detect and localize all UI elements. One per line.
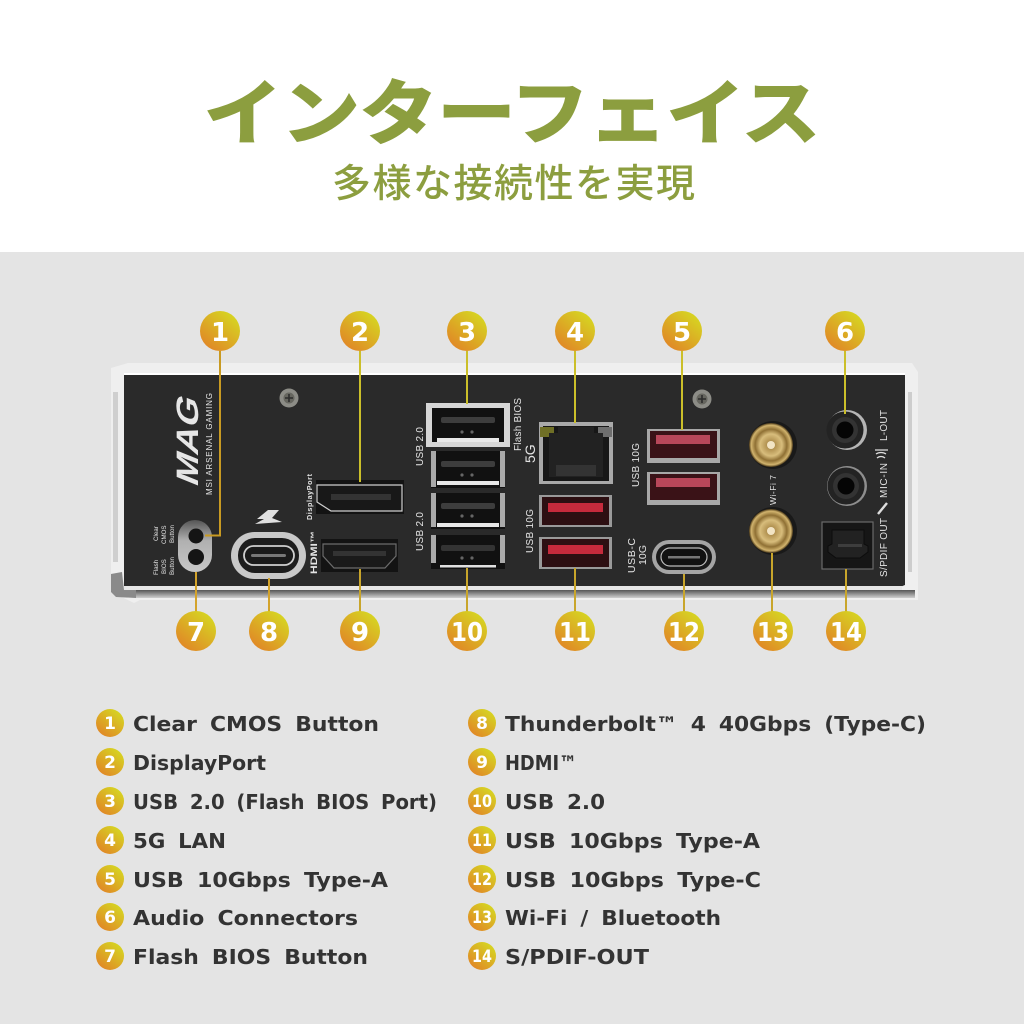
legend item 14: 14 bbox=[472, 947, 492, 967]
port: USB 2.0 stack: USB 2.0 bbox=[415, 427, 426, 466]
legend item 7: 7 bbox=[104, 947, 116, 967]
legend item 12 bbox=[468, 865, 761, 893]
legend item 14 bbox=[468, 942, 649, 970]
background: white header bbox=[0, 0, 1024, 252]
badge 11 bbox=[555, 611, 595, 651]
badge 9 bbox=[340, 611, 380, 651]
legend item 3: USB 2.0 (Flash BIOS Port) bbox=[133, 790, 437, 814]
legend item 9 bbox=[468, 748, 577, 776]
legend item 1 bbox=[96, 709, 379, 737]
badge 12: 12 bbox=[668, 618, 700, 648]
legend item 12: USB 10Gbps Type-C bbox=[505, 868, 761, 892]
shield right fold bbox=[908, 392, 912, 572]
badge 14: 14 bbox=[830, 618, 862, 648]
legend item 10: USB 2.0 bbox=[505, 790, 605, 814]
icon: MAG logo: MAG bbox=[170, 389, 205, 491]
plate top highlight bbox=[124, 373, 905, 375]
port: audio jacks: S/PDIF OUT bbox=[879, 518, 890, 577]
legend item 9: 9 bbox=[476, 753, 488, 773]
badge 12 bbox=[664, 611, 704, 651]
legend item 6: 6 bbox=[104, 908, 116, 928]
port: USB 2 bbox=[431, 451, 505, 488]
badge 9: 9 bbox=[351, 618, 369, 648]
legend item 5: USB 10Gbps Type-A bbox=[133, 868, 389, 892]
legend item 12: 12 bbox=[472, 870, 492, 890]
legend item 13 bbox=[468, 903, 721, 931]
port: USB-C 10G: USB-C bbox=[626, 538, 638, 573]
port: red USB 10G left pair: USB 10G bbox=[525, 509, 536, 553]
connector lines bbox=[196, 351, 846, 612]
port: S/PDIF optical bbox=[822, 522, 873, 569]
badge 6 bbox=[825, 311, 865, 351]
port: clear CMOS and flash BIOS buttons bbox=[153, 520, 212, 575]
badge 7: 7 bbox=[187, 618, 205, 648]
port: 5G LAN bbox=[522, 422, 613, 484]
badge 10 bbox=[447, 611, 487, 651]
port: clear CMOS and flash BIOS buttons: BIOS bbox=[161, 559, 168, 574]
port: USB 2.0 stack: Flash BIOS bbox=[513, 398, 524, 451]
icon: MAG logo bbox=[170, 389, 214, 495]
legend item 2: 2 bbox=[104, 753, 116, 773]
badge 3: 3 bbox=[458, 318, 476, 348]
badge 7 bbox=[176, 611, 216, 651]
port: HDMI bbox=[309, 531, 398, 574]
callout badges: bottom row bbox=[176, 611, 866, 651]
legend item 6: Audio Connectors bbox=[133, 906, 358, 930]
legend item 9: HDMI™ bbox=[505, 751, 577, 775]
port: USB-C 10G: 10G bbox=[637, 545, 649, 565]
port: 5G LAN: 5G bbox=[522, 444, 538, 463]
port: DisplayPort: DisplayPort bbox=[305, 473, 314, 520]
badge 8: 8 bbox=[260, 618, 278, 648]
badge 11: 11 bbox=[559, 618, 591, 648]
plate bottom highlight bbox=[124, 586, 902, 590]
legend item 3: 3 bbox=[104, 792, 116, 812]
callout badges: top row bbox=[200, 311, 865, 351]
legend item 4 bbox=[96, 826, 226, 854]
badge 13: 13 bbox=[757, 618, 789, 648]
port: Wi-Fi antenna lower bbox=[749, 507, 797, 555]
legend item 1: 1 bbox=[104, 714, 116, 734]
port: clear CMOS and flash BIOS buttons: Flash bbox=[153, 559, 160, 575]
icon: screw left bbox=[280, 388, 298, 408]
legend: left column bbox=[96, 709, 437, 970]
port: clear CMOS and flash BIOS buttons: Clear bbox=[153, 526, 160, 541]
legend item 7 bbox=[96, 942, 368, 970]
port: red USB 10G right pair: USB 10G bbox=[631, 443, 642, 487]
icon: screw right bbox=[692, 390, 712, 408]
legend item 5 bbox=[96, 865, 389, 893]
legend item 8: Thunderbolt™ 4 40Gbps (Type-C) bbox=[505, 712, 926, 736]
legend item 4: 5G LAN bbox=[133, 829, 226, 853]
port: USB 2.0 stack bbox=[415, 398, 524, 569]
port: Thunderbolt Type-C bbox=[231, 532, 306, 579]
legend item 13: Wi-Fi / Bluetooth bbox=[505, 906, 721, 930]
badge 4: 4 bbox=[566, 318, 584, 348]
badge 1: 1 bbox=[211, 318, 229, 348]
port: HDMI: HDMI™ bbox=[309, 531, 319, 574]
legend item 10: 10 bbox=[472, 792, 492, 812]
shield lower lip bbox=[136, 590, 915, 598]
legend item 4: 4 bbox=[104, 831, 116, 851]
label: Wi-Fi 7: Wi-Fi 7 bbox=[768, 475, 778, 505]
badge 14 bbox=[826, 611, 866, 651]
badge 5: 5 bbox=[673, 318, 691, 348]
port: clear CMOS and flash BIOS buttons: CMOS bbox=[161, 525, 168, 544]
port: USB 3 bbox=[431, 493, 505, 529]
port: USB 2.0 stack: USB 2.0 bbox=[415, 512, 426, 551]
subtitle: 多様な接続性を実現 bbox=[332, 153, 695, 209]
badge 3 bbox=[447, 311, 487, 351]
port: audio jacks: MIC-IN bbox=[879, 463, 890, 498]
legend item 8: 8 bbox=[476, 714, 488, 734]
legend item 5: 5 bbox=[104, 870, 116, 890]
port: red USB 10G left pair bbox=[525, 495, 612, 569]
legend item 6 bbox=[96, 903, 358, 931]
icon: thunderbolt bolt bbox=[255, 510, 282, 524]
port: USB-C 10G bbox=[626, 538, 716, 574]
panel: I/O shield bbox=[111, 351, 918, 612]
legend item 13: 13 bbox=[472, 908, 492, 928]
legend item 11 bbox=[468, 826, 761, 854]
shield left fold bbox=[113, 392, 118, 562]
badge 2 bbox=[340, 311, 380, 351]
legend item 2: DisplayPort bbox=[133, 751, 266, 775]
badge 5 bbox=[662, 311, 702, 351]
legend item 1: Clear CMOS Button bbox=[133, 712, 379, 736]
badge 4 bbox=[555, 311, 595, 351]
port: Wi-Fi antenna upper bbox=[749, 421, 797, 469]
shield metal frame bbox=[111, 363, 918, 603]
port: clear CMOS and flash BIOS buttons: Button bbox=[169, 557, 176, 575]
port: USB flash BIOS bbox=[426, 403, 510, 447]
legend item 7: Flash BIOS Button bbox=[133, 945, 368, 969]
badge 13 bbox=[753, 611, 793, 651]
port: red USB 10G right pair bbox=[631, 429, 720, 505]
legend item 11: USB 10Gbps Type-A bbox=[505, 829, 761, 853]
port: USB 4 bbox=[431, 535, 505, 569]
legend: right column bbox=[468, 709, 926, 970]
port: DisplayPort bbox=[305, 473, 404, 520]
icon: MAG logo: MSI ARSENAL GAMING bbox=[205, 393, 214, 495]
port: clear CMOS and flash BIOS buttons: Button bbox=[169, 525, 176, 543]
legend item 14: S/PDIF-OUT bbox=[505, 945, 649, 969]
legend item 10 bbox=[468, 787, 605, 815]
background: grey body bbox=[0, 252, 1024, 1024]
badge 6: 6 bbox=[836, 318, 854, 348]
badge 8 bbox=[249, 611, 289, 651]
badge 10: 10 bbox=[451, 618, 483, 648]
black plate bbox=[124, 375, 905, 587]
legend item 2 bbox=[96, 748, 266, 776]
title: インターフェイス bbox=[204, 58, 820, 159]
legend item 11: 11 bbox=[472, 831, 492, 851]
shield bottom-left corner bbox=[111, 572, 136, 598]
port: audio jacks: L-OUT bbox=[879, 410, 890, 441]
badge 1 bbox=[200, 311, 240, 351]
badge 2: 2 bbox=[351, 318, 369, 348]
port: audio jacks bbox=[826, 410, 890, 577]
